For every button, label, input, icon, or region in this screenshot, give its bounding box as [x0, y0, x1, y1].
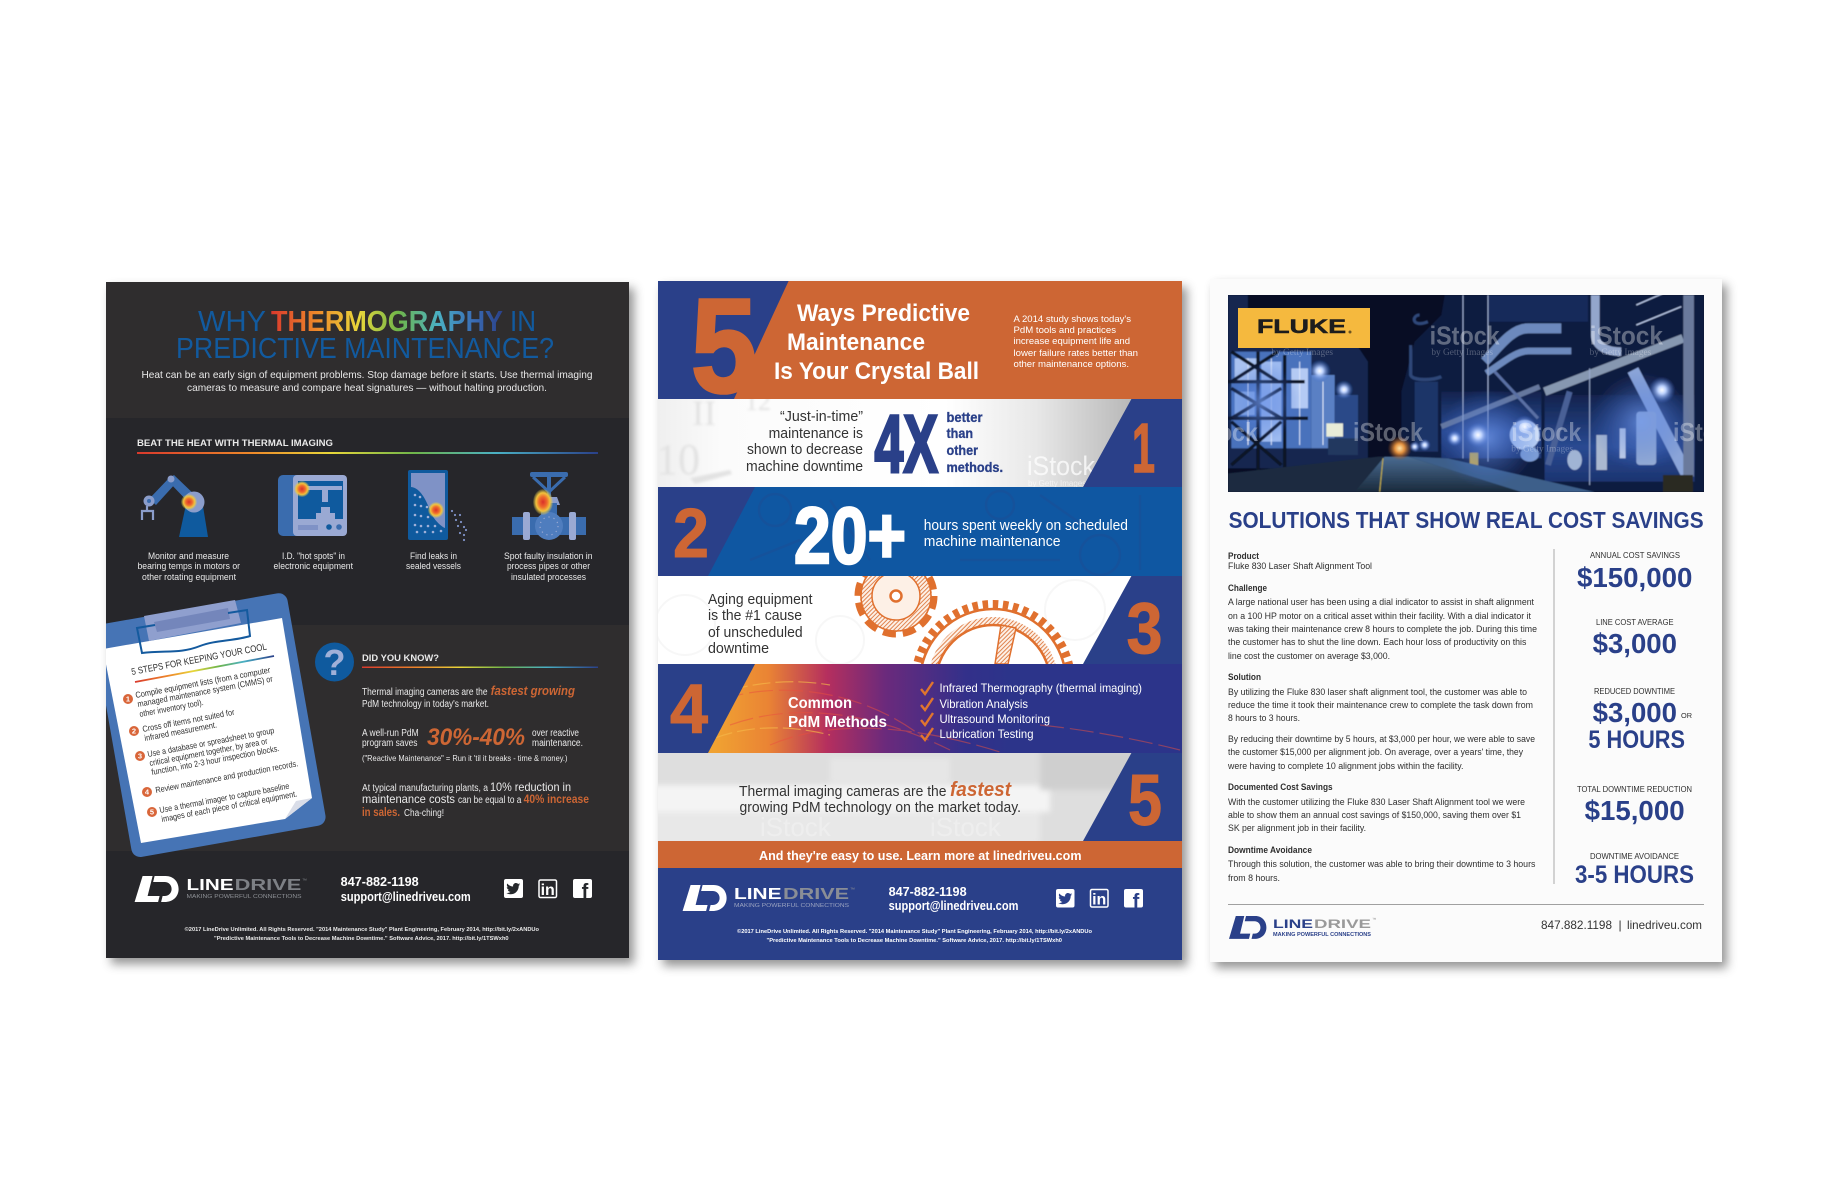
logo: LineDrive	[683, 885, 855, 911]
fastest text: growing PdM technology on the market today.	[740, 800, 1021, 816]
stat: downtime avoidance	[1575, 852, 1694, 889]
captions: thermal imaging uses: insulated processes	[511, 572, 586, 582]
row 4: common PdM methods	[658, 664, 1182, 753]
contact details: support@linedriveu.com	[341, 889, 471, 904]
captions: thermal imaging uses: Monitor and measure	[148, 551, 229, 561]
fact: fastest growing: fastest growing	[491, 684, 575, 698]
better than other methods: other	[946, 442, 978, 458]
hours text: machine maintenance	[924, 533, 1060, 550]
section: downtime avoidance: from 8 hours.	[1228, 873, 1280, 883]
row heading: Common	[788, 695, 852, 712]
icon: electronic equipment	[278, 475, 347, 536]
panel: 5 ways predictive maintenance	[650, 272, 1182, 960]
captions: thermal imaging uses	[138, 551, 592, 582]
statement text: shown to decrease	[747, 441, 863, 458]
contact details	[889, 885, 1018, 913]
intro text: Heat can be an early sign of equipment problems. Stop damage before it starts. Use thermal imaging	[142, 369, 593, 381]
icon: leaking vessel	[408, 470, 467, 541]
statement text	[746, 408, 863, 475]
section: documented cost savings: With the customer utilizing the Fluke 830 Laser Shaft Alignment tool we were	[1228, 797, 1525, 807]
icon: linkedin: in	[541, 882, 555, 899]
steps list: 1	[126, 694, 130, 704]
hero photo: industrial plant at night: iStock	[1673, 417, 1743, 447]
fastest text: Thermal imaging cameras are the	[739, 784, 946, 800]
fact: 30%-40% savings: maintenance.	[532, 738, 583, 749]
stat: annual cost savings: ANNUAL COST SAVINGS	[1590, 551, 1680, 560]
logo: LineDrive: MAKING POWERFUL CONNECTIONS	[186, 894, 302, 900]
section: solution: By reducing their downtime by 5 hours, at $3,000 per hour, we were able to save	[1228, 734, 1535, 744]
steps list: other inventory tool).	[139, 697, 204, 719]
contact details: 847-882-1198	[341, 875, 419, 889]
contact details	[1541, 918, 1702, 932]
fact: 40% increase in sales: in sales.	[362, 807, 400, 819]
hero photo: industrial plant at night: by Getty Images	[1431, 348, 1493, 358]
logo: LineDrive	[1229, 916, 1376, 939]
aging text	[708, 591, 813, 657]
fact: 40% increase in sales: 40% increase	[524, 794, 589, 806]
hero photo: industrial plant at night: iStock	[1353, 417, 1423, 447]
hero photo: industrial plant at night: iStock	[1590, 320, 1663, 350]
logo: Fluke: FLUKE	[1257, 317, 1346, 338]
gears illustration	[854, 576, 1073, 664]
fact: fastest growing	[362, 684, 575, 710]
fact: 30%-40% savings: A well-run PdM	[362, 728, 419, 739]
stat: reduced downtime: $3,000	[1593, 697, 1677, 728]
header band	[658, 272, 1182, 421]
logo: LineDrive: ™	[1372, 917, 1376, 922]
steps list: 3	[138, 752, 142, 760]
statement text: “Just-in-time”	[780, 408, 863, 425]
section: documented cost savings: Documented Cost Savings	[1228, 782, 1333, 792]
steps list: infrared measurement.	[144, 719, 218, 743]
copyright	[737, 928, 1093, 944]
study note	[1014, 314, 1138, 370]
hero photo: industrial plant at night: by Getty Images	[1590, 348, 1652, 358]
section: solution: Solution	[1228, 672, 1261, 682]
steps list: Use a database or spreadsheet to group	[147, 725, 275, 759]
contact details: 847.882.1198	[1541, 918, 1612, 932]
steps list: function, into 2-3 hour inspection blocks.	[151, 743, 280, 777]
copyright	[185, 926, 540, 942]
section: challenge: Challenge	[1228, 583, 1267, 593]
hero photo: industrial plant at night: by Getty Images	[1511, 445, 1573, 455]
title	[774, 300, 979, 385]
20+ stat: 20+	[794, 491, 906, 580]
logo: LineDrive	[135, 876, 307, 902]
better than other methods	[946, 409, 1003, 475]
big number 5: 5	[691, 272, 757, 421]
logo: LineDrive: MAKING POWERFUL CONNECTIONS	[734, 903, 849, 909]
fact: 40% increase in sales	[362, 780, 589, 819]
captions: thermal imaging uses: Spot faulty insulation in	[504, 551, 592, 561]
fact: 40% increase in sales: maintenance costs	[362, 792, 455, 806]
stat: reduced downtime: OR	[1681, 713, 1692, 720]
stat: annual cost savings: $150,000	[1577, 562, 1692, 593]
panel background	[1210, 279, 1722, 962]
row 2: 20+ hours	[658, 487, 1182, 580]
aging text: is the #1 cause	[708, 607, 802, 624]
steps list: Cross off items not suited for	[142, 707, 235, 734]
fact: 30%-40% savings: program saves	[362, 738, 418, 749]
steps list: 2	[132, 726, 136, 736]
icon: facebook: f	[582, 881, 589, 903]
steps list: critical equipment together, by area or	[149, 736, 268, 768]
steps list: 5	[150, 808, 154, 816]
hero photo: industrial plant at night	[1228, 295, 1704, 492]
hero photo: industrial plant at night: iStock	[1188, 417, 1258, 447]
logo: LineDrive: DRIVE	[1314, 917, 1371, 931]
logo: Fluke	[1238, 308, 1370, 348]
section: solution: reduce the time it took their maintenance crew to complete the task down from	[1228, 700, 1533, 710]
heading: did you know: DID YOU KNOW?	[362, 653, 439, 664]
panel background	[106, 282, 629, 958]
stat: reduced downtime: 5 HOURS	[1588, 726, 1685, 754]
steps list: Review maintenance and production records.	[155, 758, 299, 795]
number 4: 4	[670, 670, 708, 748]
captions: thermal imaging uses: Find leaks in	[410, 551, 457, 561]
fastest text: fastest	[950, 779, 1012, 801]
row 1: just-in-time: by Getty Images	[1028, 479, 1086, 488]
aging text: of unscheduled	[708, 624, 803, 641]
4X stat: 4X	[874, 399, 938, 490]
section: documented cost savings	[1228, 782, 1525, 833]
section: solution: By utilizing the Fluke 830 laser shaft alignment tool, the customer was able to	[1228, 687, 1527, 697]
title	[176, 306, 554, 365]
row 3: aging equipment	[658, 576, 1161, 664]
stat: line cost average: $3,000	[1593, 628, 1677, 659]
methods checklist	[921, 681, 1142, 741]
contact details: support@linedriveu.com	[889, 898, 1018, 913]
hero photo: industrial plant at night: iStock	[1511, 417, 1582, 447]
row heading: PdM Methods	[788, 714, 887, 731]
intro text	[142, 369, 593, 394]
captions: thermal imaging uses: electronic equipment	[274, 561, 353, 571]
title: Is Your Crystal Ball	[774, 358, 979, 385]
section: challenge: the customer has to shut the line down. Each hour loss of productivity on this	[1228, 637, 1527, 647]
section: challenge: line cost the customer on average $3,000.	[1228, 651, 1390, 661]
title: PREDICTIVE MAINTENANCE?	[176, 333, 554, 365]
title: IN	[510, 306, 536, 338]
panel: Fluke case study	[1188, 279, 1743, 962]
section: product: Product	[1228, 551, 1259, 561]
section: product: Fluke 830 Laser Shaft Alignment Tool	[1228, 561, 1372, 571]
title: WHY	[198, 306, 266, 338]
copyright: ©2017 LineDrive Unlimited. All Rights Reserved. "2014 Maintenance Study" Plant Engineering, February 2014, http://bit.ly/2xANDUo	[737, 928, 1093, 935]
heading: beat the heat: BEAT THE HEAT WITH THERMAL IMAGING	[137, 438, 333, 449]
section: documented cost savings: able to show them an annual cost savings of $150,000, saving them over $1	[1228, 810, 1521, 820]
methods checklist: Infrared Thermography (thermal imaging)	[940, 681, 1142, 695]
number 1: 1	[1132, 409, 1155, 487]
row 5: fastest growing: iStock	[930, 812, 1002, 842]
copyright: "Predictive Maintenance Tools to Decrease Machine Downtime." Software Advice, 2017. http://bit.ly/1TSWxh0	[214, 936, 509, 942]
paper sheet	[103, 618, 312, 843]
aging text: downtime	[708, 640, 769, 657]
better than other methods: methods.	[946, 459, 1003, 475]
section: solution	[1227, 672, 1535, 771]
fastest text	[739, 779, 1021, 816]
contact details: linedriveu.com	[1627, 918, 1702, 932]
intro text: cameras to measure and compare heat signatures — without halting production.	[187, 382, 547, 394]
title: Ways Predictive	[797, 300, 970, 327]
clipboard board	[92, 592, 327, 858]
did you know band	[106, 625, 629, 851]
clock background: 10	[656, 435, 700, 484]
section: downtime avoidance: Downtime Avoidance	[1228, 845, 1312, 855]
clipboard heading: 5 STEPS FOR KEEPING YOUR COOL	[131, 642, 268, 678]
icon: linkedin: in	[1092, 892, 1106, 908]
steps list: Use a thermal imager to capture baseline	[159, 781, 290, 815]
methods checklist: Ultrasound Monitoring	[940, 712, 1050, 726]
contact details	[341, 875, 471, 904]
stat: reduced downtime	[1588, 687, 1692, 754]
icon: facebook: f	[1133, 891, 1140, 913]
fact: 40% increase in sales: Cha-ching!	[404, 808, 444, 819]
contact details: 847-882-1198	[889, 885, 967, 899]
steps list: 4	[145, 788, 150, 796]
fact: 30%-40% savings: over reactive	[532, 728, 579, 739]
row 1: just-in-time: iStock	[1027, 451, 1095, 481]
icon: twitter	[504, 879, 523, 898]
contact details: |	[1618, 918, 1622, 932]
hours text: hours spent weekly on scheduled	[924, 517, 1128, 534]
stat: total downtime reduction: TOTAL DOWNTIME REDUCTION	[1577, 785, 1692, 794]
title band	[106, 282, 629, 418]
fact: 30%-40% savings	[362, 724, 583, 763]
case study body	[1227, 551, 1537, 883]
section: challenge: A large national user has been using a dial indicator to assist in shaft alignment	[1228, 597, 1534, 607]
social icons	[1056, 889, 1143, 913]
panel background	[658, 281, 1182, 960]
logo: LineDrive: DRIVE	[235, 877, 301, 894]
logo: LineDrive: LINE	[1273, 917, 1313, 931]
call to action bar	[658, 841, 1182, 868]
stat: total downtime reduction: $15,000	[1585, 795, 1685, 826]
captions: thermal imaging uses: bearing temps in motors or	[138, 561, 240, 571]
fact: fastest growing: Thermal imaging cameras are the	[362, 687, 488, 698]
steps list: managed maintenance system (CMMS) or	[137, 674, 274, 709]
better than other methods: than	[946, 425, 973, 441]
logo: LineDrive: LINE	[186, 877, 234, 894]
number 2: 2	[673, 494, 709, 572]
section: documented cost savings: SK per alignment job in their facility.	[1228, 823, 1366, 833]
captions: thermal imaging uses: process pipes or other	[507, 561, 590, 571]
copyright: "Predictive Maintenance Tools to Decrease Machine Downtime." Software Advice, 2017. http://bit.ly/1TSWxh0	[766, 938, 1062, 944]
stat: downtime avoidance: DOWNTIME AVOIDANCE	[1590, 852, 1679, 861]
hero photo: industrial plant at night: iStock	[1430, 320, 1500, 350]
clock background: 12	[745, 387, 771, 416]
fact: 40% increase in sales: 10% reduction in	[490, 780, 571, 794]
number 3: 3	[1126, 589, 1162, 669]
better than other methods: better	[946, 409, 983, 425]
logo: LineDrive: MAKING POWERFUL CONNECTIONS	[1273, 932, 1371, 938]
stat: reduced downtime: REDUCED DOWNTIME	[1594, 687, 1675, 696]
logo: LineDrive: DRIVE	[783, 886, 849, 903]
statement text: machine downtime	[746, 458, 863, 475]
panel: thermography infographic	[92, 282, 629, 958]
clock background	[664, 399, 770, 484]
title: THERMOGRAPHY	[271, 306, 503, 338]
methods checklist: Vibration Analysis	[940, 697, 1028, 711]
statement text: maintenance is	[769, 425, 863, 442]
fact: fastest growing: PdM technology in today's market.	[362, 699, 489, 710]
fact: 30%-40% savings: 30%-40%	[427, 724, 525, 751]
icon: question mark	[315, 642, 354, 683]
study note: A 2014 study shows today's	[1014, 314, 1131, 325]
fact: 30%-40% savings: ("Reactive Maintenance" = Run it 'til it breaks - time & money.)	[362, 753, 568, 763]
icon: question mark: ?	[324, 642, 346, 683]
copyright: ©2017 LineDrive Unlimited. All Rights Reserved. "2014 Maintenance Study" Plant Engineering, February 2014, http://bit.ly/2xANDUo	[185, 926, 540, 933]
clipboard: 5 steps	[92, 592, 327, 858]
logo: LineDrive: LINE	[734, 886, 782, 903]
call to action bar: And they're easy to use. Learn more at linedriveu.com	[759, 849, 1082, 863]
section: solution: the customer $15,000 per alignment job. On average, over a years' time, they	[1228, 747, 1523, 757]
section: downtime avoidance: Through this solution, the customer was able to bring their downtime to 3 hours	[1228, 859, 1536, 869]
social icons	[504, 879, 592, 903]
section: product	[1228, 551, 1372, 571]
fact: 40% increase in sales: At typical manufacturing plants, a	[362, 783, 488, 794]
stats column	[1575, 551, 1694, 889]
section: challenge: on a 100 HP motor on a critical asset within their facility. With a dial indicator it	[1228, 611, 1531, 621]
section: solution: 8 hours to 3 hours.	[1228, 713, 1300, 723]
title: Maintenance	[787, 329, 925, 356]
icon: robot arm	[142, 475, 208, 537]
heading: SOLUTIONS THAT SHOW REAL COST SAVINGS	[1229, 507, 1704, 533]
section: challenge: was taking their maintenance crew 8 hours to complete the job. During this time	[1227, 624, 1537, 634]
stat: downtime avoidance: 3-5 HOURS	[1575, 861, 1694, 889]
study note: lower failure rates better than	[1014, 348, 1138, 359]
logo: LineDrive: ™	[850, 887, 855, 893]
study note: PdM tools and practices	[1014, 325, 1116, 336]
row 1: just-in-time	[658, 399, 1154, 487]
captions: thermal imaging uses: other rotating equipment	[142, 572, 236, 582]
section: downtime avoidance	[1228, 845, 1536, 883]
row 5: fastest growing	[658, 753, 1161, 841]
steps list	[123, 665, 299, 824]
logo: LineDrive: ™	[302, 878, 307, 884]
stat: line cost average: LINE COST AVERAGE	[1596, 618, 1674, 627]
section: challenge	[1227, 583, 1537, 661]
steps list: Compile equipment lists (from a computer	[135, 665, 271, 700]
captions: thermal imaging uses: sealed vessels	[406, 561, 461, 571]
steps list: images of each piece of critical equipment.	[161, 789, 298, 824]
clock background: II	[692, 393, 716, 433]
clipboard heading	[131, 642, 274, 682]
study note: other maintenance options.	[1014, 359, 1129, 370]
fact: 40% increase in sales: can be equal to a	[458, 795, 522, 806]
section: solution: were having to complete 10 alignment jobs within the facility.	[1227, 761, 1463, 771]
icon: twitter	[1056, 889, 1074, 908]
row 5: fastest growing: iStock	[760, 812, 832, 842]
methods checklist: Lubrication Testing	[940, 727, 1034, 741]
hours text	[924, 517, 1128, 550]
number 5: 5	[1128, 761, 1162, 841]
stat: total downtime reduction	[1577, 785, 1692, 826]
icon: insulated valve	[512, 472, 586, 540]
hero photo: industrial plant at night: by Getty Images	[1271, 348, 1333, 358]
row heading	[788, 695, 887, 731]
captions: thermal imaging uses: I.D. "hot spots" in	[282, 551, 345, 561]
aging text: Aging equipment	[708, 591, 813, 608]
study note: increase equipment life and	[1014, 336, 1130, 347]
